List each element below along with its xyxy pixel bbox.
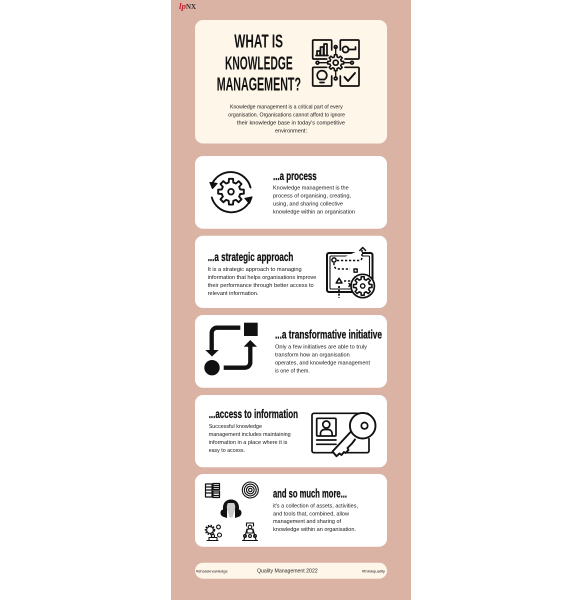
- text: and tools that, combined, allow: [273, 512, 350, 518]
- icon: id card and key: [312, 413, 376, 456]
- title: KNOWLEDGE: [225, 53, 293, 73]
- panel: access to information: [195, 395, 387, 467]
- text: operates, and knowledge management: [275, 360, 370, 366]
- text: [273, 504, 358, 533]
- text: their performance through better access to: [208, 283, 314, 289]
- title: MANAGEMENT?: [217, 75, 301, 95]
- intro text: organisation. Organisations cannot afford to ignore: [228, 113, 345, 119]
- text: using, and sharing collective: [273, 202, 343, 208]
- heading: ...a strategic approach: [208, 250, 293, 264]
- heading: ...a transformative initiative: [275, 327, 382, 341]
- text: transform how an organisation: [275, 352, 350, 358]
- text: it's a collection of assets, activities,: [273, 504, 358, 510]
- footer: #shareknowledge: [196, 568, 228, 573]
- text: easy to access.: [209, 448, 245, 454]
- footer: [195, 563, 387, 579]
- text: Knowledge management is the: [273, 186, 349, 192]
- panel: a strategic approach: [195, 236, 387, 308]
- text: It is a strategic approach to managing: [208, 267, 302, 273]
- panel: a transformative initiative: [195, 315, 387, 388]
- text: Successful knowledge: [209, 424, 262, 430]
- text: management includes maintaining: [209, 432, 291, 438]
- text: process of organising, creating,: [273, 194, 351, 200]
- logo: lp: [179, 2, 186, 11]
- logo: [179, 2, 197, 11]
- text: management and sharing of: [273, 519, 341, 525]
- intro text: environment:: [275, 129, 307, 135]
- icon: knowledge hub: [313, 40, 359, 86]
- panel: intro: [195, 20, 387, 144]
- icon: documents grid: [206, 484, 220, 498]
- heading: ...a process: [273, 169, 317, 183]
- footer: Quality Management 2022: [257, 569, 318, 575]
- icon: team hierarchy: [242, 523, 258, 540]
- text: [275, 344, 370, 374]
- text: knowledge within an organisation.: [273, 527, 356, 533]
- heading: and so much more...: [273, 486, 347, 500]
- intro text: [228, 105, 345, 135]
- title: WHAT IS: [234, 32, 283, 52]
- footer: #thinkquality: [362, 568, 385, 573]
- icon: strategy map: [327, 248, 374, 298]
- icon: transformation flow: [204, 323, 258, 375]
- text: information in a place where it is: [209, 440, 287, 446]
- text: relevant information.: [208, 291, 259, 297]
- title: [217, 32, 301, 95]
- text: [208, 267, 316, 297]
- icon: head with headset: [220, 500, 242, 518]
- text: information that helps organisations improve: [208, 275, 316, 281]
- intro text: Knowledge management is a critical part of every: [230, 105, 343, 111]
- intro text: their knowledge base in today's competitive: [237, 121, 345, 127]
- logo: NX: [186, 2, 197, 11]
- text: knowledge within an organisation: [273, 210, 355, 216]
- heading: ...access to information: [209, 407, 298, 421]
- text: [209, 424, 291, 454]
- panel: a process: [195, 156, 387, 229]
- poster background: [171, 0, 411, 600]
- text: is one of them.: [275, 368, 310, 374]
- text: [273, 186, 355, 216]
- icon: maze target: [242, 482, 258, 498]
- icon: gears and people: [206, 525, 222, 540]
- panel: and so much more: [195, 474, 387, 547]
- icon: gear cycle: [210, 172, 252, 212]
- text: Only a few initiatives are able to truly: [275, 344, 367, 350]
